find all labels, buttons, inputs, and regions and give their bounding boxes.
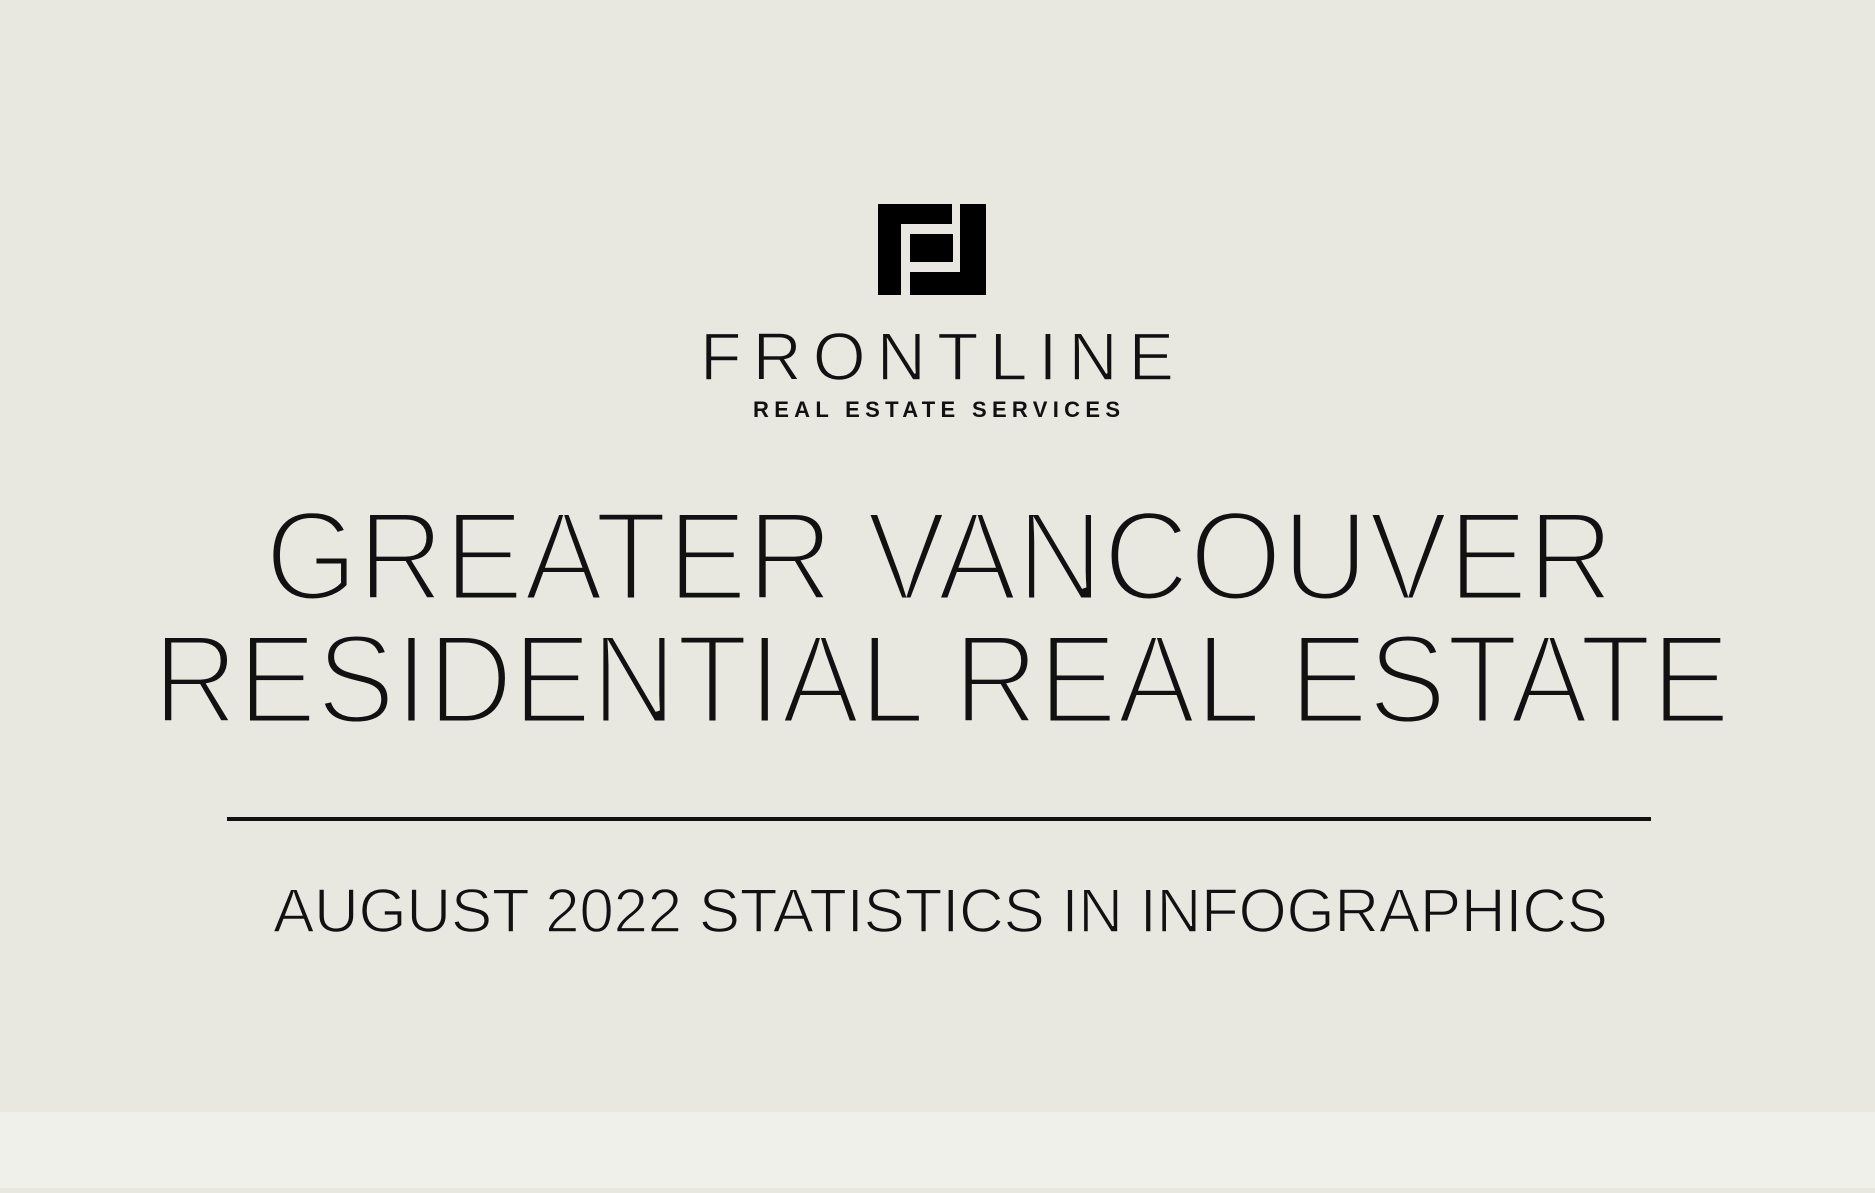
subtitle: AUGUST 2022 STATISTICS IN INFOGRAPHICS <box>273 877 1608 946</box>
title <box>153 485 1730 750</box>
title: GREATER VANCOUVER <box>265 485 1614 627</box>
title: RESIDENTIAL REAL ESTATE <box>153 608 1730 750</box>
logo tagline: REAL ESTATE SERVICES <box>753 397 1120 422</box>
icon: frontline logo mark <box>878 204 986 295</box>
logo wordmark: FRONTLINE <box>700 319 1174 395</box>
